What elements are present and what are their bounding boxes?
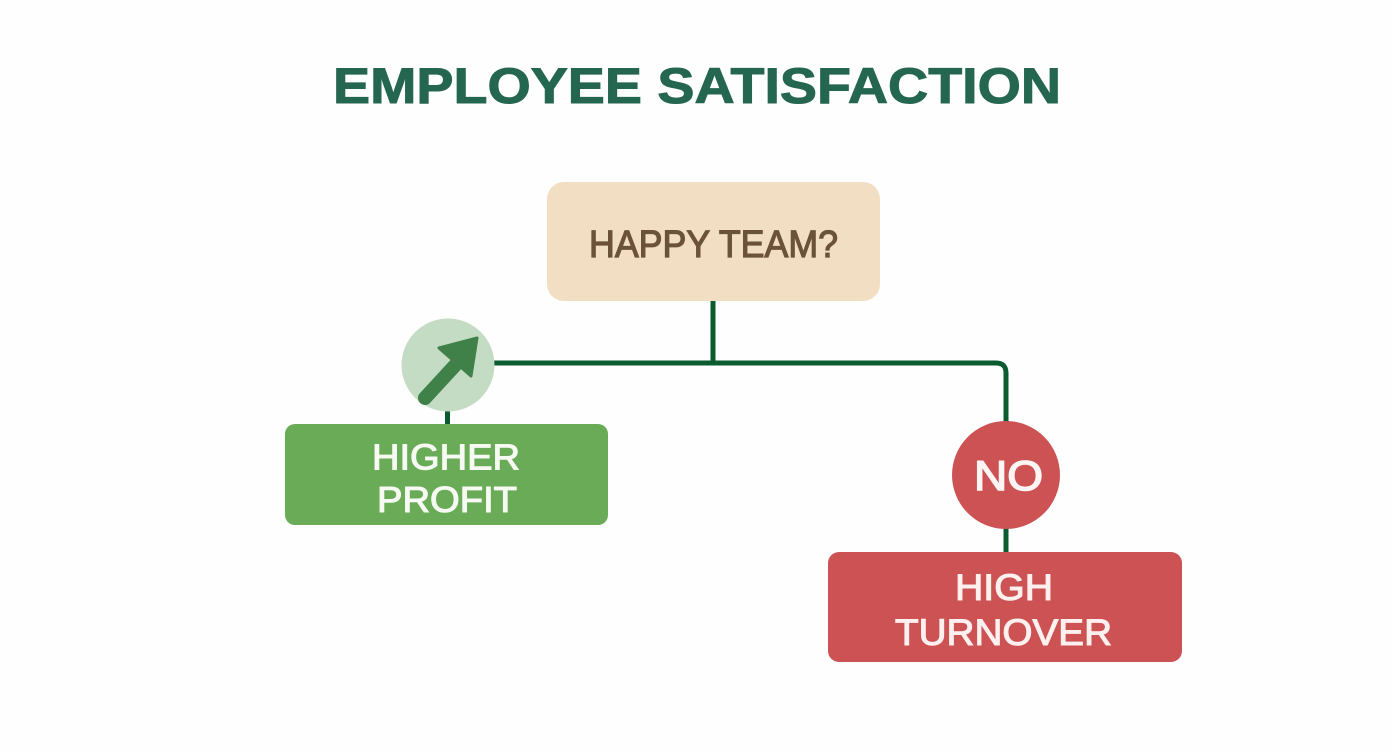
outcome box: higher profit: HIGHER <box>372 436 520 478</box>
title: EMPLOYEE SATISFACTION <box>333 58 1061 114</box>
decision box: happy team <box>547 182 880 301</box>
outcome box: high turnover: HIGH <box>955 567 1053 608</box>
no badge: NO <box>974 452 1043 499</box>
outcome box: high turnover <box>828 552 1182 662</box>
connector lines <box>448 300 1006 554</box>
decision box: happy team: HAPPY TEAM? <box>589 224 838 266</box>
outcome box: higher profit <box>285 424 608 525</box>
no badge <box>952 421 1060 529</box>
outcome box: higher profit: PROFIT <box>377 479 517 520</box>
icon: up arrow in circle <box>402 318 494 412</box>
outcome box: high turnover: TURNOVER <box>895 612 1112 653</box>
